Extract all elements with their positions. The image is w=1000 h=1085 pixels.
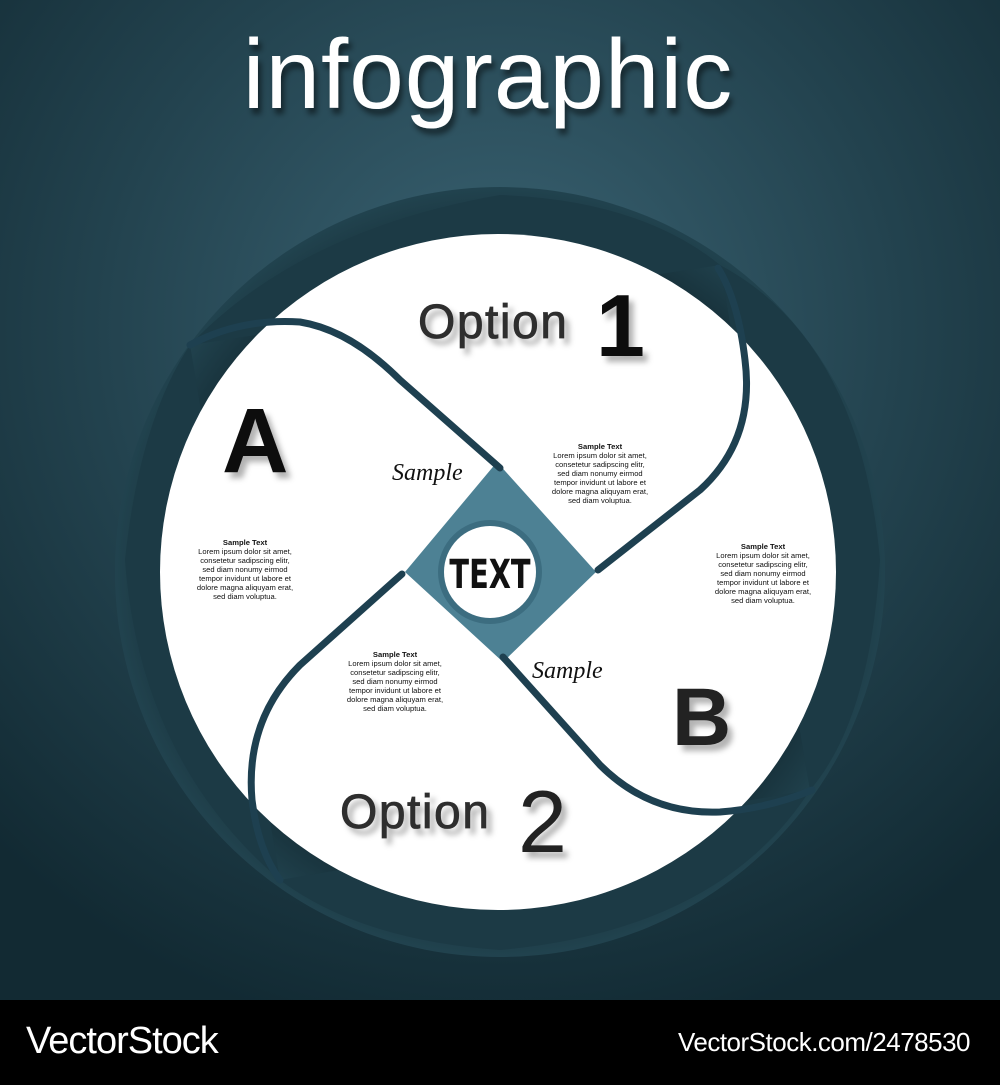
center circle: TEXT	[438, 520, 542, 624]
text blocks: dolore magna aliquyam erat,	[552, 487, 648, 496]
label: Option 2	[340, 772, 567, 871]
text blocks: Lorem ipsum dolor sit amet,	[553, 451, 647, 460]
text blocks: sed diam voluptua.	[213, 592, 277, 601]
text blocks: Sample Text	[223, 538, 268, 547]
text blocks: dolore magna aliquyam erat,	[347, 695, 443, 704]
footer	[0, 1000, 1000, 1080]
label: Option 1	[418, 276, 645, 375]
text blocks: dolore magna aliquyam erat,	[197, 583, 293, 592]
text blocks: tempor invidunt ut labore et	[717, 578, 810, 587]
outer dark ring	[115, 187, 885, 957]
white circle	[160, 234, 836, 910]
label: Option 2: 2	[518, 772, 567, 871]
text blocks: Sample Text	[578, 442, 623, 451]
sample labels	[392, 460, 603, 684]
label: B: B	[672, 672, 731, 763]
label: Option 1: Option	[418, 296, 568, 349]
label: Option 2: Option	[340, 786, 490, 839]
text blocks: sed diam voluptua.	[568, 496, 632, 505]
footer: VectorStock	[26, 1020, 220, 1062]
text blocks	[197, 442, 811, 713]
text blocks: sed diam voluptua.	[731, 596, 795, 605]
text blocks: tempor invidunt ut labore et	[199, 574, 292, 583]
text blocks: sed diam nonumy eirmod	[352, 677, 438, 686]
text blocks: Sample Text	[741, 542, 786, 551]
text blocks: consetetur sadipscing elitr,	[200, 556, 290, 565]
text blocks: Lorem ipsum dolor sit amet,	[716, 551, 810, 560]
text blocks: consetetur sadipscing elitr,	[350, 668, 440, 677]
label: Option 1: 1	[596, 276, 645, 375]
center teal diamond	[405, 462, 596, 662]
footer: VectorStock.com/2478530	[678, 1027, 970, 1057]
text blocks: Sample Text	[373, 650, 418, 659]
label: A: A	[222, 390, 288, 492]
sample labels: Sample	[532, 658, 603, 684]
text blocks: Lorem ipsum dolor sit amet,	[198, 547, 292, 556]
text blocks: sed diam nonumy eirmod	[557, 469, 643, 478]
text blocks: sed diam voluptua.	[363, 704, 427, 713]
text blocks: dolore magna aliquyam erat,	[715, 587, 811, 596]
center circle: TEXT: TEXT	[449, 552, 531, 598]
text blocks: sed diam nonumy eirmod	[202, 565, 288, 574]
title: infographic	[243, 19, 733, 129]
text blocks: sed diam nonumy eirmod	[720, 569, 806, 578]
text blocks: Lorem ipsum dolor sit amet,	[348, 659, 442, 668]
pinwheel dividers	[190, 268, 812, 880]
text blocks: tempor invidunt ut labore et	[554, 478, 647, 487]
text blocks: consetetur sadipscing elitr,	[718, 560, 808, 569]
text blocks: tempor invidunt ut labore et	[349, 686, 442, 695]
text blocks: consetetur sadipscing elitr,	[555, 460, 645, 469]
sample labels: Sample	[392, 460, 463, 486]
